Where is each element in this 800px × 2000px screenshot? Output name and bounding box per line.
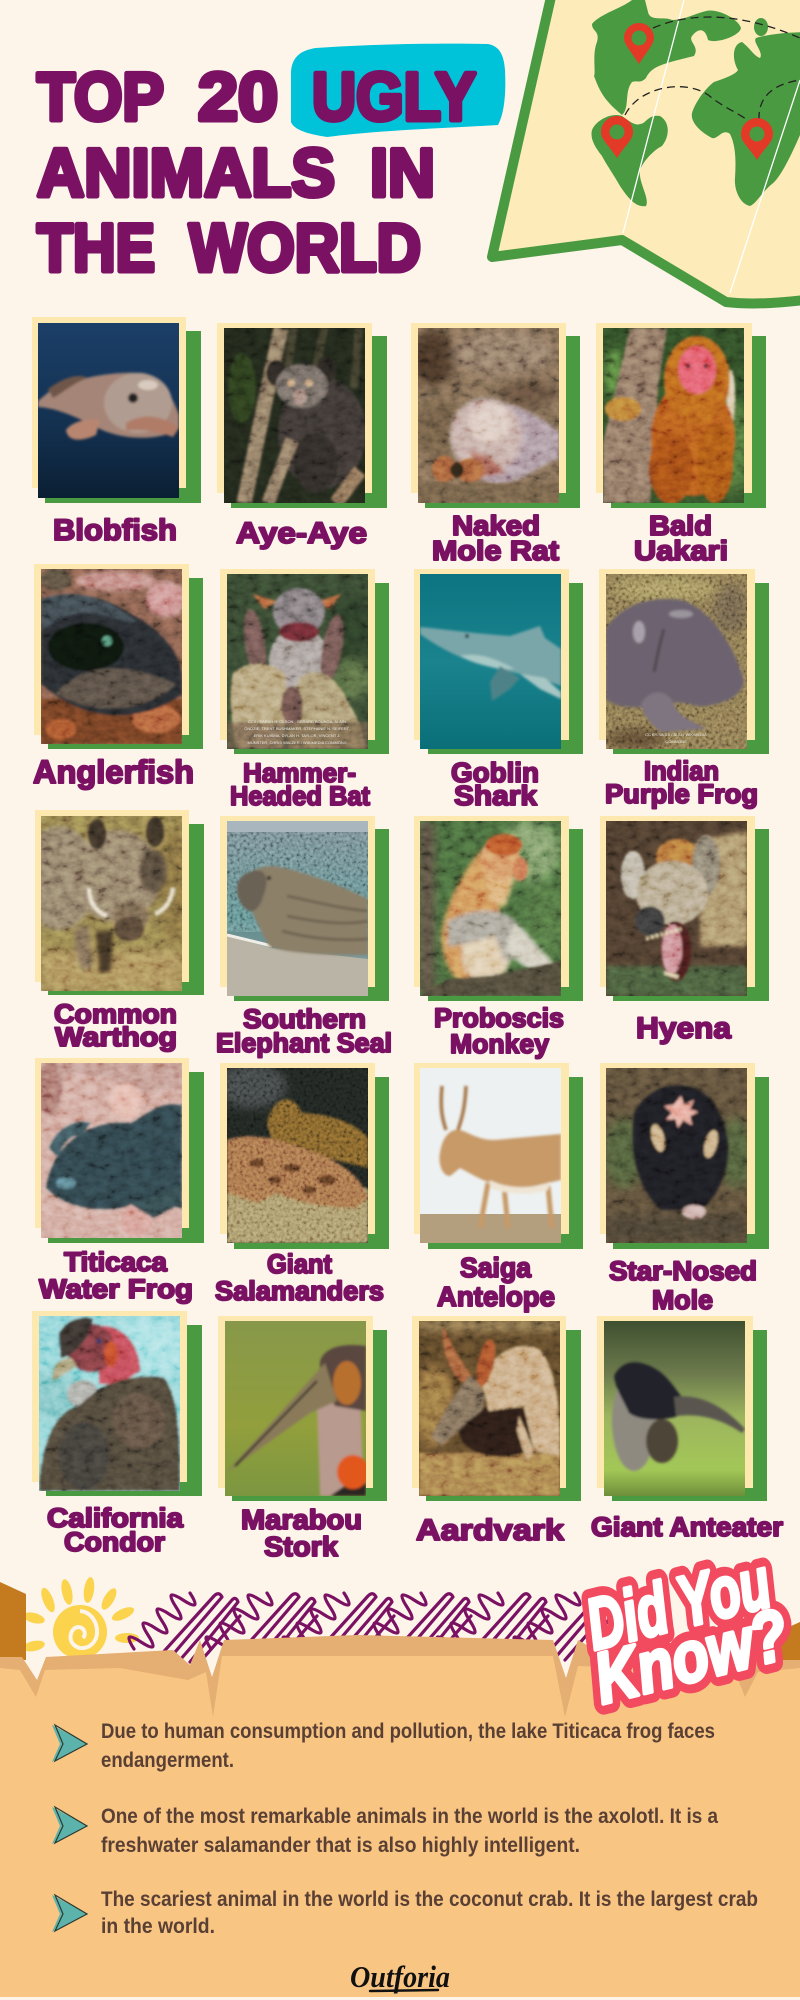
brown cliff right: [760, 1622, 800, 1665]
card: Aardvark: [412, 1316, 581, 1547]
name: Southern Elephant Seal: Elephant Seal: [216, 1028, 392, 1058]
photo: california condor: [39, 1316, 180, 1491]
name: Aye-Aye: Aye-Aye: [236, 517, 367, 550]
name: Common Warthog: Warthog: [55, 1022, 177, 1052]
name: Giant Anteater: Giant Anteater: [591, 1512, 783, 1542]
name: Bald Uakari: [634, 510, 728, 566]
title: 20: [198, 59, 278, 135]
photo: hammer-headed bat: ERIK KUISMA, DYLAN H. TAYLOR, VINCENT J.: [254, 733, 340, 738]
name: Southern Elephant Seal: Southern: [243, 1004, 366, 1034]
name: Common Warthog: [54, 999, 177, 1052]
fact 1: [101, 1720, 715, 1772]
card: Aye-Aye: [217, 323, 387, 550]
name: Hammer-Headed Bat: Hammer-: [243, 758, 356, 788]
name: Goblin Shark: Shark: [454, 780, 537, 811]
photo: bald uakari: [603, 328, 744, 503]
card: California Condor: [29, 1311, 202, 1557]
name: Titicaca Water Frog: [39, 1247, 193, 1304]
name: Titicaca Water Frog: Water Frog: [39, 1274, 193, 1304]
name: Saiga Antelope: [437, 1252, 555, 1312]
name: Proboscis Monkey: [434, 1003, 564, 1059]
photo: saiga antelope: [420, 1068, 561, 1243]
name: Star-Nosed Mole: Star-Nosed: [609, 1256, 757, 1286]
name: Naked Mole Rat: [432, 510, 559, 566]
photo: naked mole rat: [418, 328, 559, 503]
card: Hyena: [600, 816, 769, 1045]
photo: aye-aye: [224, 328, 365, 503]
photo: giant anteater: [604, 1321, 745, 1496]
fact 3: [101, 1888, 758, 1938]
card: Common Warthog: [21, 810, 204, 1052]
fact 3: in the world.: [101, 1915, 215, 1938]
name: Hyena: Hyena: [636, 1012, 731, 1045]
photo: marabou stork: [225, 1321, 366, 1496]
name: Goblin Shark: Goblin: [451, 757, 539, 788]
title: ANIMALS: [37, 135, 335, 211]
name: Hammer-Headed Bat: [230, 758, 370, 811]
card: Naked Mole Rat: [411, 323, 580, 566]
name: Blobfish: Blobfish: [53, 514, 177, 547]
photo: proboscis monkey: [420, 821, 561, 996]
title: WORLD: [189, 210, 421, 286]
squiggle pattern: [129, 1593, 623, 1662]
photo: giant salamanders: [227, 1068, 368, 1243]
photo: hammer-headed bat: [227, 574, 368, 749]
card: Southern Elephant Seal: [216, 816, 392, 1058]
fact 1: Due to human consumption and pollution, the lake Titicaca frog faces: [101, 1720, 715, 1743]
photo: hammer-headed bat: CC0 / SARAH H. OLSON , GERARD BOUNGA, ALAIN: [248, 719, 346, 724]
card: Blobfish: [32, 317, 201, 547]
name: Indian Purple Frog: [605, 756, 758, 809]
name: California Condor: Condor: [64, 1527, 166, 1557]
name: Marabou Stork: Stork: [264, 1531, 338, 1562]
title: THE: [37, 210, 155, 286]
name: Proboscis Monkey: Proboscis: [434, 1003, 564, 1033]
name: Giant Salamanders: [215, 1249, 384, 1306]
photo: star-nosed mole: [606, 1068, 747, 1243]
photo: common warthog: [41, 816, 182, 991]
fact 1: endangerment.: [101, 1749, 234, 1772]
torn paper band: [0, 1635, 800, 1720]
name: Star-Nosed Mole: Mole: [652, 1285, 713, 1315]
brown cliff left: [0, 1582, 26, 1660]
card: Giant Anteater: [591, 1316, 783, 1542]
card: Bald Uakari: [596, 323, 766, 566]
card: Star-Nosed Mole: [600, 1063, 769, 1315]
fact 2: One of the most remarkable animals in the world is the axolotl. It is a: [101, 1805, 718, 1828]
photo: indian purple frog: COMMONS: [665, 739, 687, 744]
name: Titicaca Water Frog: Titicaca: [64, 1247, 168, 1277]
name: Proboscis Monkey: Monkey: [450, 1029, 549, 1059]
name: Anglerfish: Anglerfish: [33, 754, 194, 790]
name: Common Warthog: Common: [54, 999, 177, 1029]
name: Naked Mole Rat: Naked: [452, 510, 540, 541]
name: California Condor: [47, 1503, 184, 1557]
name: Marabou Stork: Marabou: [241, 1504, 362, 1535]
name: Goblin Shark: [451, 757, 539, 811]
title: TOP: [37, 59, 164, 135]
photo: blobfish: [38, 323, 179, 498]
card: Marabou Stork: [218, 1316, 387, 1562]
name: Southern Elephant Seal: [216, 1004, 392, 1058]
card: Goblin Shark: [414, 569, 583, 811]
name: California Condor: California: [47, 1503, 184, 1533]
torn paper spikes: [0, 1656, 800, 1997]
bullet arrow 3: [52, 1895, 88, 1932]
card: Proboscis Monkey: [414, 816, 583, 1059]
icon: map pin: [601, 23, 773, 160]
photo: aardvark: [419, 1321, 560, 1496]
panel: did you know: [0, 1543, 800, 1997]
name: Star-Nosed Mole: [609, 1256, 757, 1315]
photo: titicaca water frog: [41, 1063, 182, 1238]
title: IN: [370, 135, 435, 211]
name: Indian Purple Frog: Purple Frog: [605, 779, 758, 809]
icon: sun: [22, 1576, 139, 1659]
card: Titicaca Water Frog: [35, 1058, 204, 1304]
card: Indian Purple Frog: [599, 569, 769, 809]
photo: hammer-headed bat: ONDZIE, TRENT BUSHMAKER, STEPHANIE N. SEIFERT,: [244, 726, 350, 731]
photo: goblin shark: [420, 574, 561, 749]
name: Bald Uakari: Bald: [649, 510, 712, 541]
bullet arrow 2: [52, 1807, 88, 1844]
name: Marabou Stork: [241, 1504, 362, 1562]
name: Indian Purple Frog: Indian: [644, 756, 719, 786]
name: Hammer-Headed Bat: Headed Bat: [230, 781, 370, 811]
title: UGLY: [312, 59, 476, 135]
name: Naked Mole Rat: Mole Rat: [432, 535, 559, 566]
fact 2: [101, 1805, 718, 1857]
card: Saiga Antelope: [414, 1063, 583, 1312]
fact 2: freshwater salamander that is also highly intelligent.: [101, 1834, 580, 1857]
photo: hammer-headed bat: MUNSTER, CHRIS WALZER / WIKIMEDIA COMMONS: [248, 740, 347, 745]
name: Giant Salamanders: Giant: [267, 1249, 332, 1279]
name: Giant Salamanders: Salamanders: [215, 1276, 384, 1306]
logo: Outforia: Outforia: [350, 1959, 450, 1994]
title: [37, 44, 505, 286]
photo: hyena: [606, 821, 747, 996]
name: Bald Uakari: Uakari: [634, 535, 728, 566]
name: Aardvark: Aardvark: [416, 1514, 564, 1547]
photo: indian purple frog: CC BY-SA 3.0 / BIJU / WIKIMEDIA: [645, 732, 707, 737]
photo: southern elephant seal: [227, 821, 368, 996]
name: Saiga Antelope: Antelope: [437, 1281, 555, 1312]
name: Saiga Antelope: Saiga: [460, 1252, 531, 1283]
photo: indian purple frog: [606, 574, 747, 749]
card: Giant Salamanders: [215, 1063, 389, 1306]
card: Anglerfish: [33, 564, 203, 790]
icon: world map with pins: [492, 0, 800, 303]
highlight behind UGLY: [291, 44, 505, 137]
bullet arrow 1: [52, 1725, 88, 1762]
photo: anglerfish: [41, 569, 182, 744]
card: Hammer-Headed Bat: [220, 569, 389, 811]
